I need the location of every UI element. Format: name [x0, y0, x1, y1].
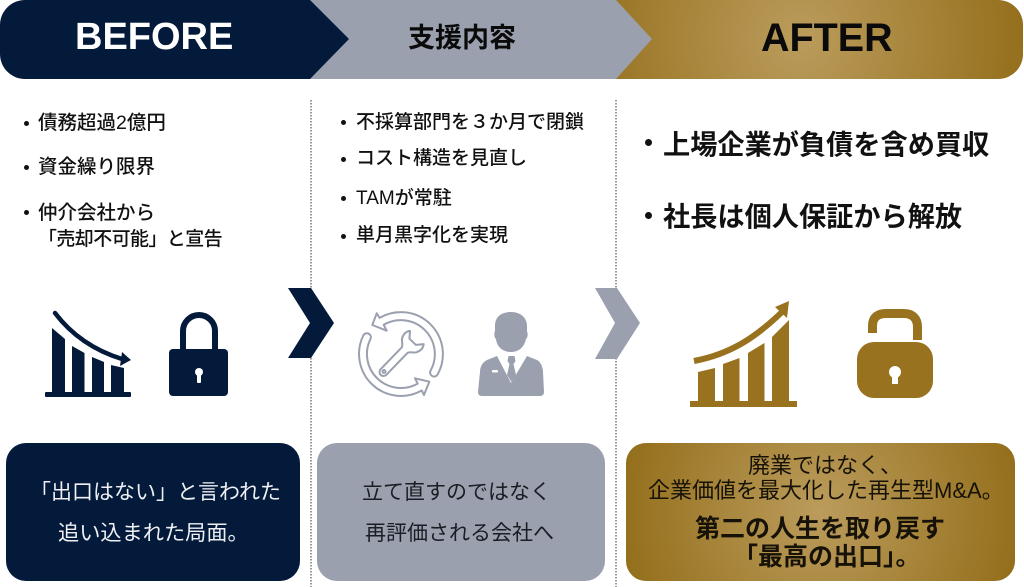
column divider left	[310, 100, 312, 587]
callout: before summary	[6, 443, 300, 581]
text block: before bullets: 「売却不可能」と宣告	[38, 229, 222, 250]
icon: open padlock	[857, 314, 933, 398]
callout: after summary text: 企業価値を最大化した再生型M&A。	[648, 478, 1004, 503]
icon: rising bar chart	[690, 301, 797, 407]
callout: after summary text	[648, 453, 1004, 571]
text block: before bullets: 債務超過2億円	[38, 112, 166, 134]
text block: support bullets	[341, 112, 584, 246]
icon: declining bar chart	[45, 313, 131, 397]
callout background: AFTER	[626, 443, 1015, 581]
icon: wrench with circular arrows	[359, 312, 443, 396]
text block: before bullets	[24, 112, 222, 250]
icon: businessman	[478, 312, 544, 396]
text block: support bullets: TAMが常駐	[356, 188, 452, 209]
callout: after summary text: 「最高の出口」。	[733, 543, 921, 571]
arrow: grey chevron	[595, 288, 640, 359]
callout: support summary	[317, 443, 605, 581]
header: AFTER band	[616, 0, 1023, 79]
text block: after bullets: 上場企業が負債を含め買収	[663, 129, 989, 160]
text block: before bullets: 仲介会社から	[38, 202, 155, 224]
callout: support summary: 立て直すのではなく	[362, 481, 551, 504]
callout: before summary: 追い込まれた局面。	[58, 522, 249, 545]
text block: after bullets	[645, 129, 989, 232]
text block: support bullets: 不採算部門を３か月で閉鎖	[356, 112, 584, 133]
callout: after summary text: 廃業ではなく、	[748, 453, 902, 478]
text block: support bullets: コスト構造を見直し	[356, 148, 527, 169]
callout: after summary text: 第二の人生を取り戻す	[695, 515, 945, 543]
callout: support summary: 再評価される会社へ	[365, 522, 554, 545]
text block: support bullets: 単月黒字化を実現	[356, 225, 508, 246]
heading: AFTER: AFTER	[761, 16, 893, 60]
column divider right	[615, 100, 617, 587]
text block: after bullets: 社長は個人保証から解放	[663, 201, 962, 232]
heading: BEFORE: BEFORE	[75, 16, 233, 58]
header: BEFORE band	[0, 0, 349, 79]
header: support band	[310, 0, 652, 79]
icon: closed padlock	[169, 315, 228, 396]
arrow: navy chevron	[288, 288, 334, 358]
callout: before summary: 「出口はない」と言われた	[30, 481, 281, 504]
text block: before bullets: 資金繰り限界	[38, 156, 155, 178]
heading: 支援内容: 支援内容	[408, 23, 516, 53]
